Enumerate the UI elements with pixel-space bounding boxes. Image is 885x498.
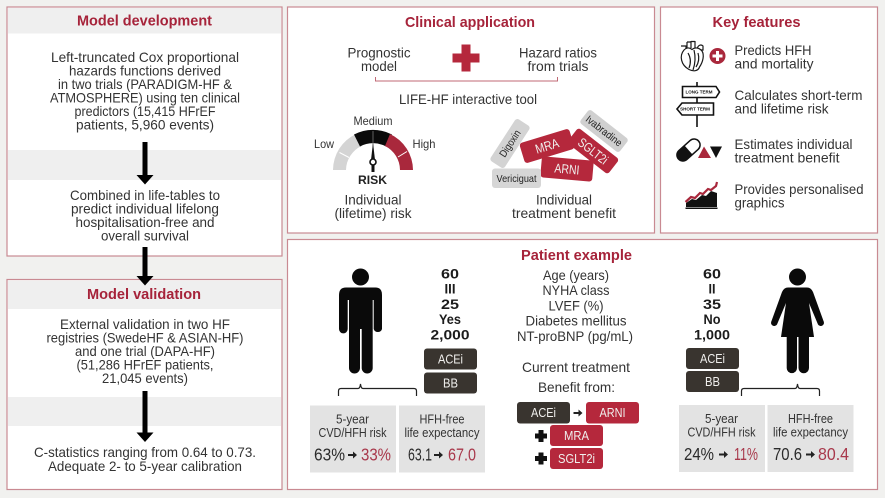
text: current treatment: Current treatment <box>522 359 630 375</box>
bracket: patient 1 <box>338 384 416 396</box>
text: predicts HFH <box>734 42 814 72</box>
stat box: patient 2 risk: 11% <box>734 444 758 464</box>
heading: clinical application: Clinical application <box>405 14 535 31</box>
icon group: treatment pills: MRA <box>533 135 561 157</box>
text: patient 1 values <box>430 266 470 342</box>
pill: patient 2 ACEi <box>686 348 739 369</box>
stat box: patient 1 life expectancy <box>399 406 485 472</box>
stat box: patient 2 risk: 5-year <box>705 411 739 426</box>
text block: Cox model derivation: patients, 5,960 events) <box>76 116 214 132</box>
pill: SGLT2i: SGLT2i <box>558 451 595 466</box>
text block: Cox model derivation: ATMOSPHERE) using ten clinical <box>50 90 240 106</box>
text: patient 2 values: No <box>704 311 720 327</box>
pill: patient 2 BB: BB <box>705 374 720 389</box>
icon: signpost: SHORT TERM <box>680 106 710 112</box>
text block: life-tables: hospitalisation-free and <box>76 214 214 230</box>
icon: signpost <box>677 82 720 127</box>
text: individual treatment benefit: Individual <box>536 192 592 208</box>
text block: C-statistics: C-statistics ranging from 0.64 to 0.73. <box>34 444 256 460</box>
stat box: patient 2 life expectancy: HFH-free <box>788 411 833 426</box>
text: patient variables: NYHA class <box>542 282 610 298</box>
icon: red plus <box>452 44 480 72</box>
text block: Cox model derivation: in two trials (PARADIGM-HF & <box>58 76 233 92</box>
bracket joining inputs <box>376 77 558 81</box>
text: patient 1 values: III <box>444 280 456 296</box>
pill: patient 1 ACEi: ACEi <box>438 352 463 366</box>
icon: male figure <box>339 268 382 374</box>
text block: C-statistics <box>34 444 256 474</box>
stat box: patient 1 risk: CVD/HFH risk <box>318 425 387 440</box>
icon: plus for SGLT2i <box>535 452 547 464</box>
icon: signpost: LONG TERM <box>686 90 713 94</box>
text: calculates risk <box>734 87 862 116</box>
chart: risk gauge: Low <box>314 137 334 151</box>
icon: anatomical heart <box>681 41 703 71</box>
text: personalised graphics: Provides personalised <box>734 181 864 197</box>
icon: rising chart <box>686 182 718 209</box>
text block: life-tables: Combined in life-tables to <box>70 187 220 203</box>
text: LIFE-HF interactive tool: LIFE-HF interactive tool <box>399 91 537 107</box>
stat box: patient 1 life expectancy: 63.1 <box>408 444 432 464</box>
pill: patient 1 ACEi <box>424 348 477 370</box>
stat box: patient 1 risk: 5-year <box>336 412 370 426</box>
text: individual treatment benefit: treatment benefit <box>512 205 616 221</box>
stat box: patient 1 risk: 33% <box>361 444 391 464</box>
text block: external validation: 21,045 events) <box>102 370 188 386</box>
text: hazard ratios <box>519 44 597 74</box>
text: hazard ratios: Hazard ratios <box>519 44 597 60</box>
text block: life-tables: overall survival <box>101 228 189 244</box>
text: predicts HFH: Predicts HFH <box>734 42 812 58</box>
pill: patient 2 ACEi: ACEi <box>700 351 725 366</box>
text: calculates risk: Calculates short-term <box>734 87 862 103</box>
stat box: patient 2 life expectancy: 70.6 <box>773 444 802 464</box>
text: calculates risk: and lifetime risk <box>734 100 829 116</box>
text: patient 1 values: 2,000 <box>430 326 470 342</box>
pill: SGLT2i <box>550 448 603 469</box>
panel: key features <box>660 7 878 233</box>
stat box: patient 2 life expectancy: 80.4 <box>818 444 849 464</box>
text: patient 1 values: 60 <box>441 266 459 282</box>
icon: capsule and triangles <box>674 137 722 163</box>
text block: external validation: (51,286 HFrEF patients, <box>76 356 214 372</box>
text: patient 2 values: 35 <box>703 296 721 312</box>
text: estimates benefit: treatment benefit <box>734 150 840 166</box>
icon group: treatment pills: ARNI <box>554 160 580 178</box>
text block: Cox model derivation: hazards functions derived <box>69 62 221 78</box>
pill: MRA: MRA <box>564 428 589 443</box>
text block: Cox model derivation: Left-truncated Cox proportional <box>51 49 239 65</box>
icon group: treatment pills <box>489 109 629 188</box>
panel: clinical application <box>288 7 654 233</box>
text: estimates benefit <box>734 136 852 166</box>
pill: patient 2 BB <box>686 371 739 392</box>
text block: life-tables <box>70 187 220 244</box>
arrow: development to validation <box>136 247 154 286</box>
text block: Cox model derivation <box>50 49 240 132</box>
stat box: patient 1 life expectancy: HFH-free <box>420 412 464 426</box>
text block: external validation: registries (SwedeHF & ASIAN-HF) <box>46 330 244 346</box>
text: hazard ratios: from trials <box>528 58 588 74</box>
text: patient 2 values: 60 <box>703 266 721 282</box>
bracket: patient 2 <box>742 384 820 396</box>
icon group: treatment pills: Digoxin <box>497 128 524 160</box>
text: patient variables: LVEF (%) <box>548 298 604 314</box>
chart: risk gauge <box>314 114 436 187</box>
icon group: treatment pills: Ivabradine <box>583 113 624 149</box>
text block: external validation <box>46 316 244 386</box>
icon group: treatment pills: SGLT2i <box>575 135 611 167</box>
text: prognostic model: Prognostic <box>348 44 410 60</box>
text: individual treatment benefit <box>512 192 616 221</box>
icon: female figure <box>771 268 824 373</box>
stat box: patient 1 risk: 63% <box>314 444 345 464</box>
text block: C-statistics: Adequate 2- to 5-year calibration <box>48 458 242 474</box>
pill: patient 1 BB: BB <box>443 376 458 390</box>
text: patient 1 values: Yes <box>439 311 461 327</box>
text: benefit from: Benefit from: <box>538 379 615 395</box>
text block: Cox model derivation: predictors (15,415 HFrEF <box>74 103 216 119</box>
icon: plus for MRA <box>535 430 547 442</box>
heading: model validation: Model validation <box>87 286 201 303</box>
pill: current ACEi: ACEi <box>531 405 556 420</box>
text: patient 2 values <box>694 266 730 342</box>
text: predicts HFH: and mortality <box>734 56 814 72</box>
text: estimates benefit: Estimates individual <box>734 136 852 152</box>
stat box: patient 2 life expectancy: life expectancy <box>773 424 848 440</box>
heading: key features: Key features <box>712 14 800 31</box>
text: patient variables: NT-proBNP (pg/mL) <box>517 328 633 344</box>
text: prognostic model: model <box>361 58 397 74</box>
heading: model development: Model development <box>77 12 212 30</box>
text: individual lifetime risk: Individual <box>344 192 402 208</box>
text: personalised graphics: graphics <box>734 194 784 210</box>
text: individual lifetime risk <box>334 192 412 221</box>
heading: patient example: Patient example <box>521 247 632 264</box>
stat box: patient 1 risk <box>310 406 396 472</box>
pill: ARNI: ARNI <box>600 405 626 420</box>
panel: model validation <box>7 280 282 490</box>
text: patient 2 values: II <box>708 280 716 296</box>
chart: risk gauge: RISK <box>358 173 387 187</box>
text: prognostic model <box>348 44 410 74</box>
pill: current ACEi <box>517 402 570 424</box>
text: personalised graphics <box>734 181 864 210</box>
pill: patient 1 BB <box>424 372 477 394</box>
text: individual lifetime risk: (lifetime) risk <box>334 205 412 221</box>
stat box: patient 1 life expectancy: life expectancy <box>404 425 480 440</box>
text: patient 2 values: 1,000 <box>694 326 730 342</box>
stat box: patient 2 risk <box>679 405 765 472</box>
icon: plus in circle <box>710 48 726 64</box>
text block: external validation: and one trial (DAPA-HF) <box>75 343 215 359</box>
stat box: patient 2 life expectancy <box>768 405 854 472</box>
stat box: patient 1 life expectancy: 67.0 <box>448 444 476 464</box>
pill: ARNI <box>586 402 639 424</box>
chart: risk gauge: High <box>412 137 436 151</box>
text block: life-tables: predict individual lifelong <box>71 200 219 216</box>
stat box: patient 2 risk: 24% <box>684 444 714 464</box>
text: patient variables: Diabetes mellitus <box>526 312 626 328</box>
pill: MRA <box>550 425 603 446</box>
arrow: derivation to life-tables <box>136 142 154 184</box>
arrow: validation to C-statistics <box>136 391 154 442</box>
text: patient variables: Age (years) <box>543 267 609 283</box>
panel: model development <box>7 7 282 256</box>
text block: external validation: External validation in two HF <box>60 316 230 332</box>
text: patient variables <box>517 267 633 344</box>
text: patient 1 values: 25 <box>441 296 459 312</box>
stat box: patient 2 risk: CVD/HFH risk <box>688 424 756 440</box>
panel: patient example <box>288 240 878 490</box>
arrow: ACEi to ARNI <box>574 410 582 416</box>
icon group: treatment pills: Vericiguat <box>496 173 537 185</box>
chart: risk gauge: Medium <box>354 114 392 128</box>
